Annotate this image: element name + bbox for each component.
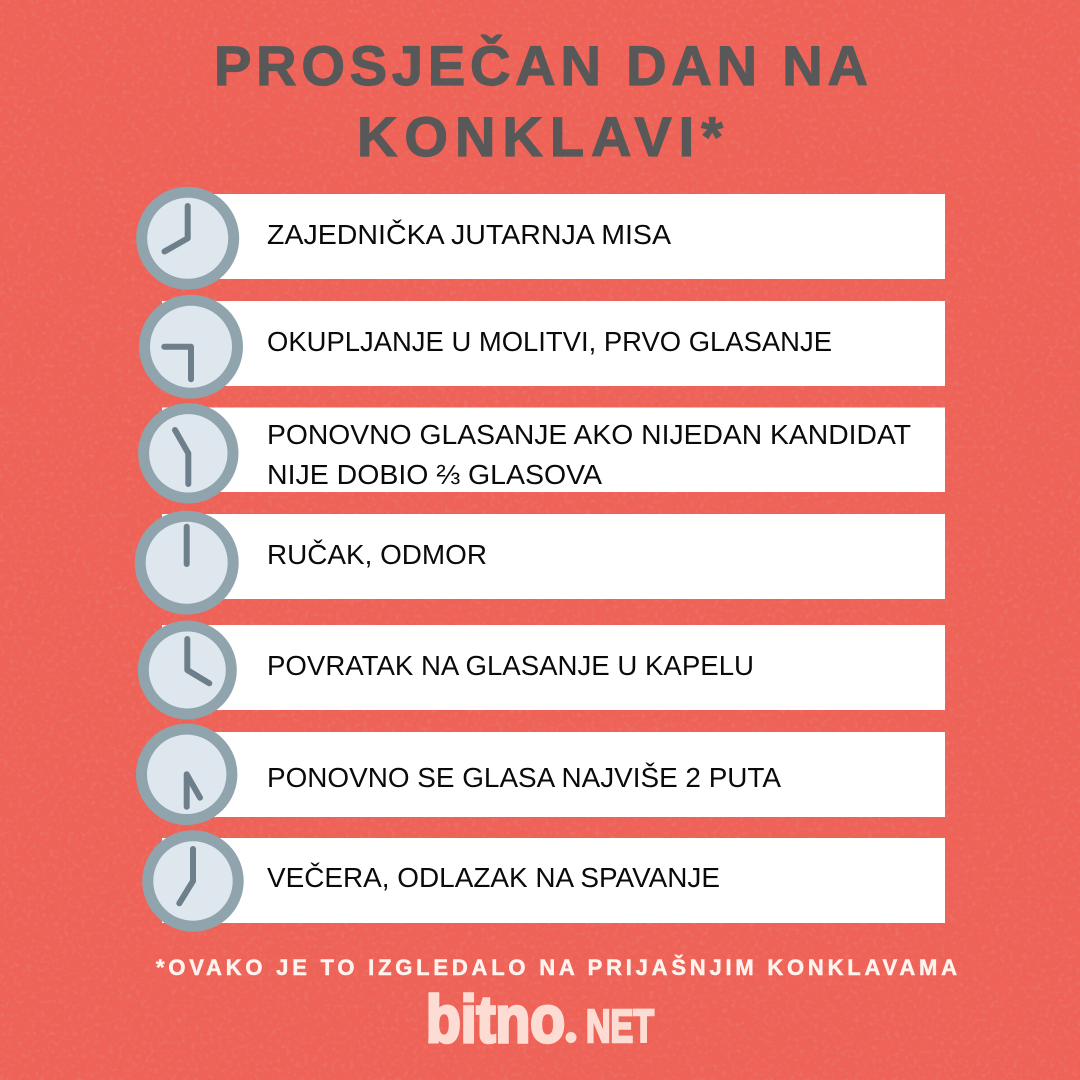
row 7: dinner bbox=[162, 838, 945, 923]
logo: bitno.NET: bitno bbox=[426, 982, 565, 1056]
row 6: voting again bbox=[162, 732, 945, 817]
title: KONKLAVI* bbox=[357, 105, 723, 168]
icon: clock 3 bbox=[144, 409, 233, 498]
row 6: voting again: PONOVNO SE GLASA NAJVIŠE 2 PUTA bbox=[267, 762, 781, 793]
row 3: repeat vote bbox=[162, 408, 945, 492]
row 5: return to chapel bbox=[162, 625, 945, 710]
row 1: morning mass: ZAJEDNIČKA JUTARNJA MISA bbox=[267, 219, 671, 250]
icon: clock 6 bbox=[142, 729, 232, 820]
row 2: first vote: OKUPLJANJE U MOLITVI, PRVO GLASANJE bbox=[267, 326, 832, 357]
row 2: first vote bbox=[162, 301, 945, 386]
title: PROSJEČAN DAN NA bbox=[214, 34, 868, 97]
row 4: lunch: RUČAK, ODMOR bbox=[267, 539, 487, 570]
icon: clock 4 bbox=[140, 516, 233, 609]
row 1: morning mass bbox=[162, 194, 945, 279]
icon: clock 5 bbox=[143, 626, 231, 714]
footnote: *OVAKO JE TO IZGLEDALO NA PRIJAŠNJIM KONKLAVAMA bbox=[156, 955, 957, 980]
row 3: repeat vote: PONOVNO GLASANJE AKO NIJEDAN KANDIDAT bbox=[267, 419, 911, 450]
title bbox=[214, 34, 868, 168]
icon: clock 1 bbox=[142, 192, 234, 284]
icon: clock 7 bbox=[148, 836, 238, 926]
row 3: repeat vote: NIJE DOBIO ⅔ GLASOVA bbox=[267, 459, 602, 490]
row 4: lunch bbox=[162, 514, 945, 599]
row 5: return to chapel: POVRATAK NA GLASANJE U KAPELU bbox=[267, 650, 754, 681]
logo: bitno.NET: NET bbox=[586, 1000, 654, 1052]
panel: schedule list bbox=[162, 194, 945, 923]
icon: clock 2 bbox=[144, 300, 238, 393]
row 7: dinner: VEČERA, ODLAZAK NA SPAVANJE bbox=[267, 862, 720, 893]
